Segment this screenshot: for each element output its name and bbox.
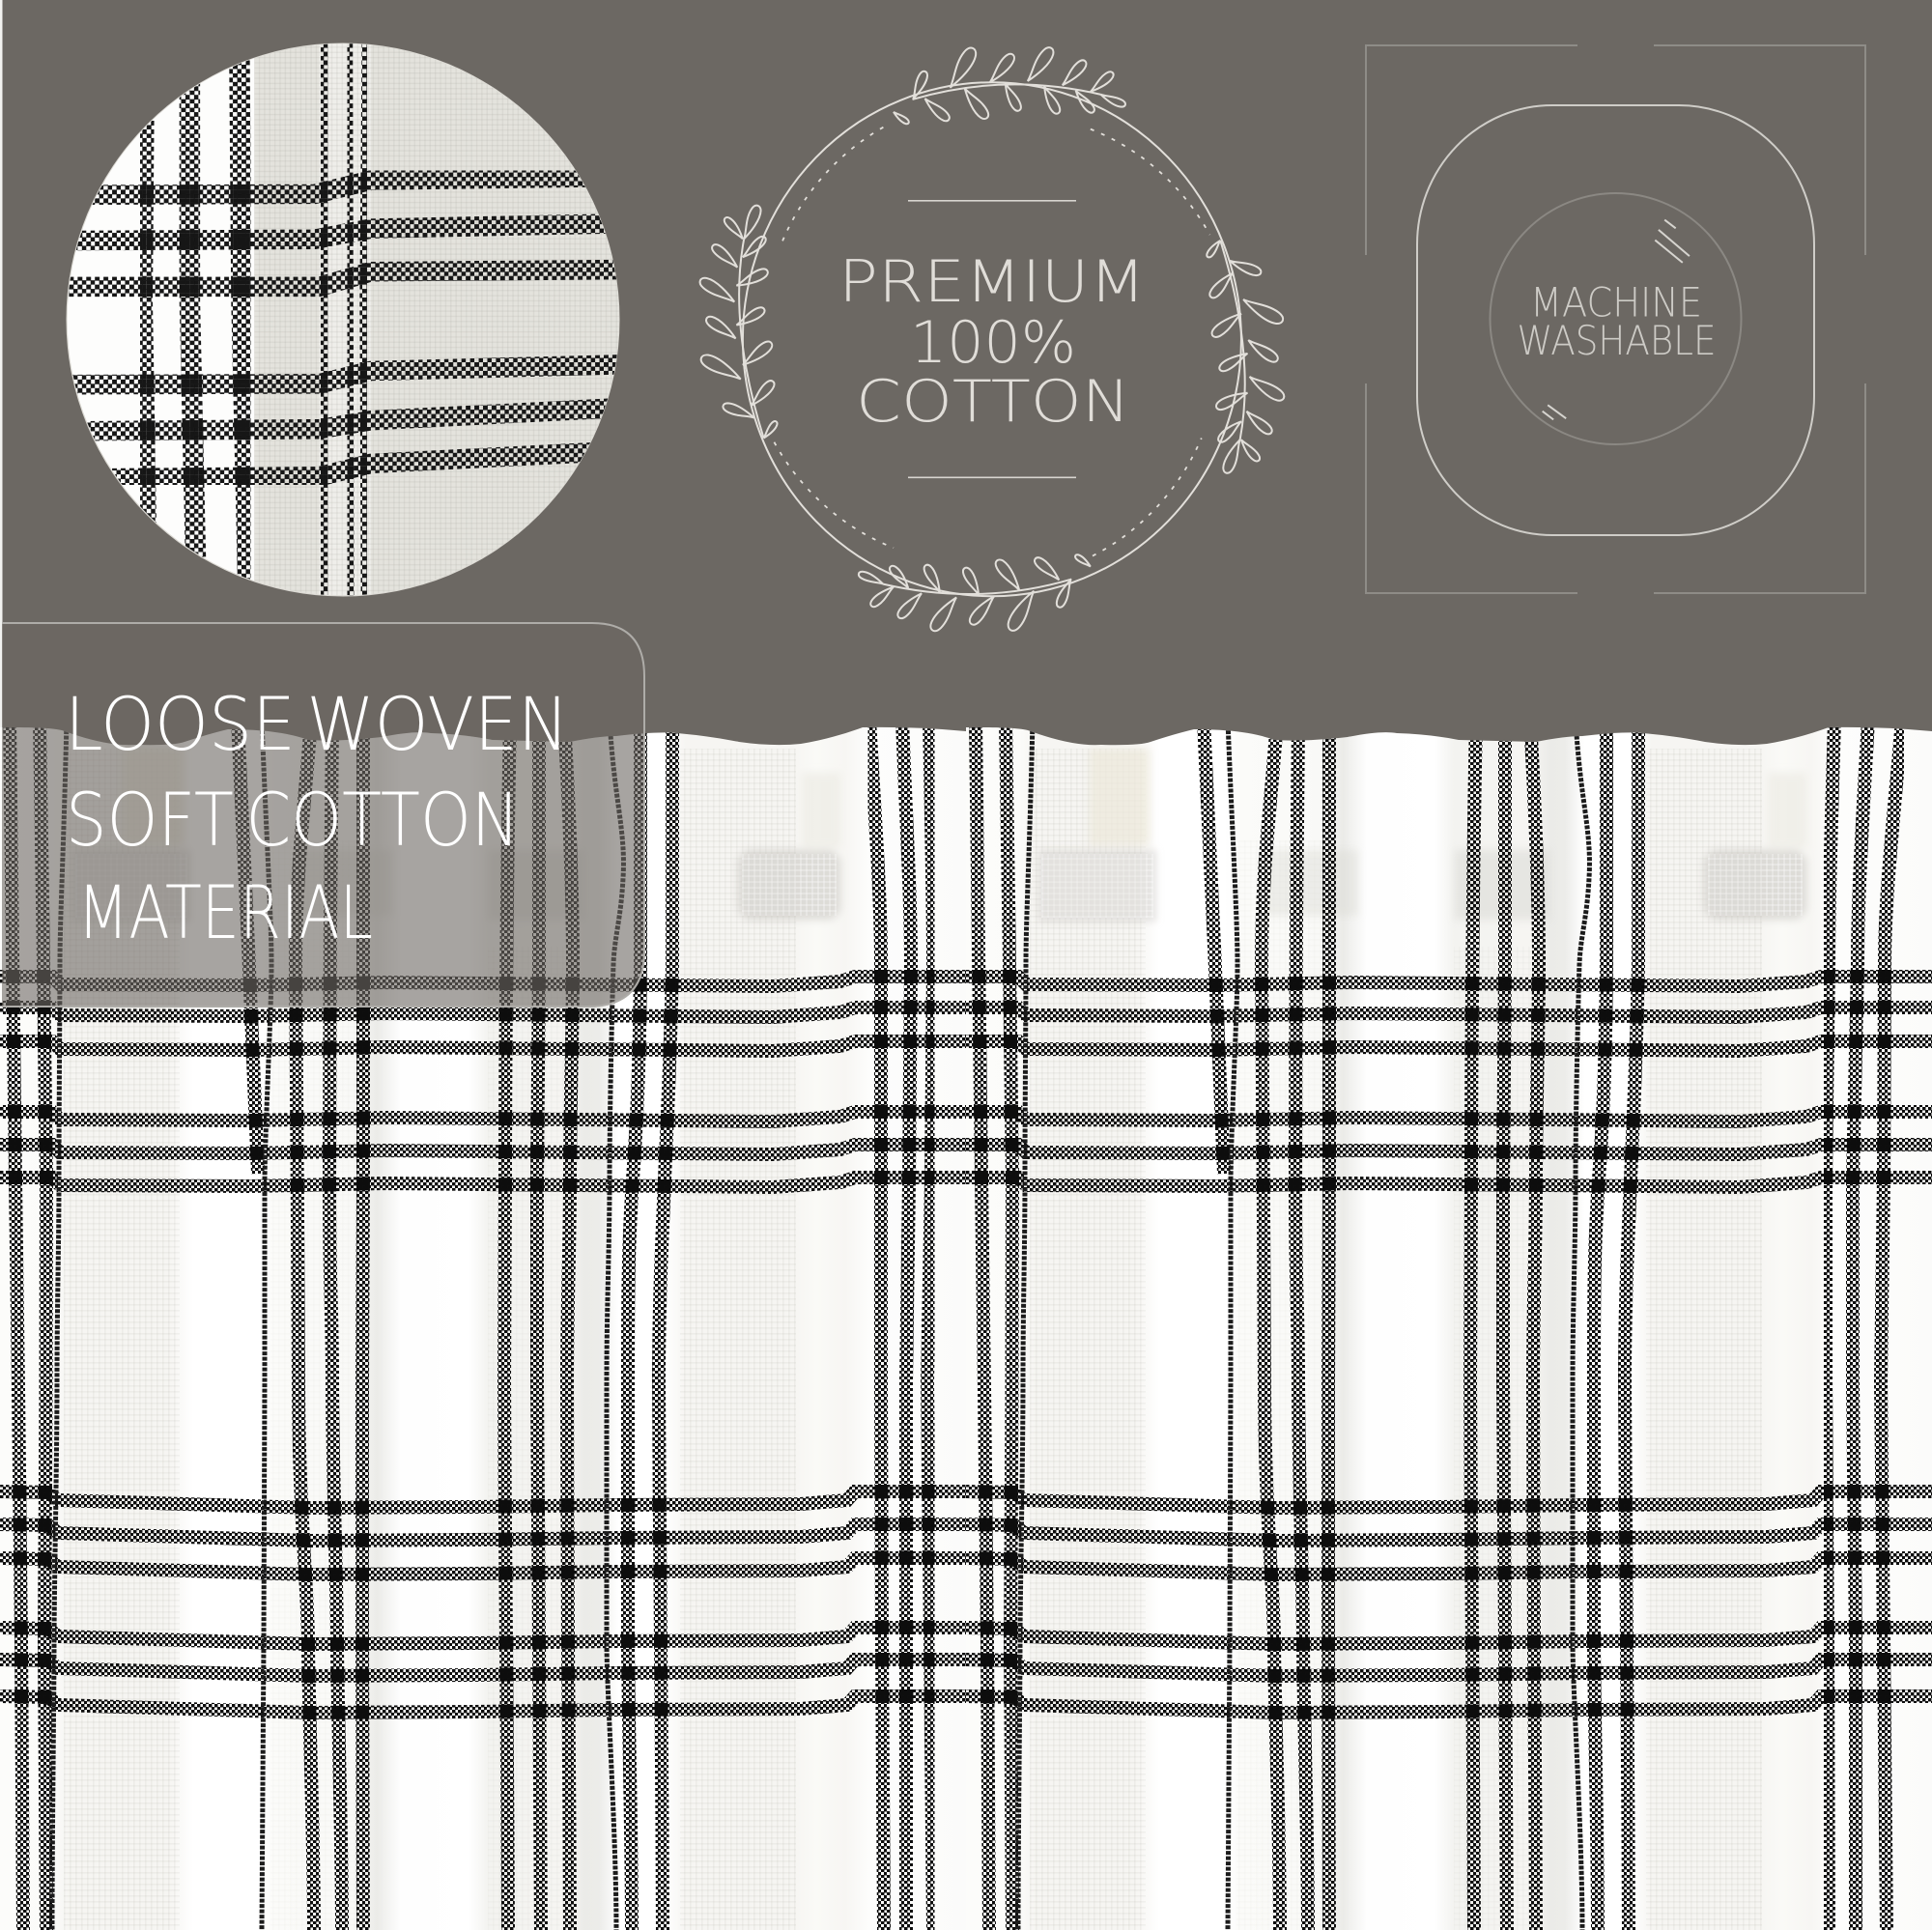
machine washable text: WASHABLE — [1517, 317, 1716, 364]
callout text: SOFT COTTON — [66, 777, 520, 863]
bottom divider line — [908, 477, 1076, 478]
top and bottom sprigs — [697, 45, 1287, 634]
badge text: COTTON — [856, 368, 1130, 436]
machine washable text: MACHINE — [1530, 278, 1702, 326]
badge text: PREMIUM — [838, 248, 1146, 316]
callout text — [65, 681, 569, 955]
corner frame — [1366, 45, 1865, 593]
badge: premium 100% cotton — [697, 45, 1287, 634]
rounded square outline — [1417, 105, 1814, 535]
callout text: MATERIAL — [77, 869, 373, 955]
callout text: LOOSE WOVEN — [65, 681, 569, 767]
dotted inner arcs — [774, 125, 1209, 556]
callout panel: loose woven soft cotton material — [2, 622, 645, 1008]
left curtain panel — [0, 720, 966, 1930]
right curtain panel — [966, 720, 1932, 1930]
badge text — [838, 248, 1146, 436]
wreath circle — [743, 82, 1241, 596]
translucent callout background — [2, 622, 645, 1008]
wreath — [697, 45, 1287, 634]
badge: machine washable — [1366, 45, 1865, 593]
callout outline — [2, 623, 644, 1007]
left edge light strip — [0, 0, 2, 734]
inner circle — [1490, 193, 1741, 444]
glint ticks — [1543, 220, 1690, 419]
fabric swatch circle — [65, 39, 625, 604]
badge text: 100% — [910, 309, 1076, 377]
left and right sprigs — [697, 204, 779, 440]
curtain fabric with black and white plaid — [0, 720, 1932, 1930]
top divider line — [908, 200, 1076, 202]
machine washable text — [1517, 278, 1716, 364]
